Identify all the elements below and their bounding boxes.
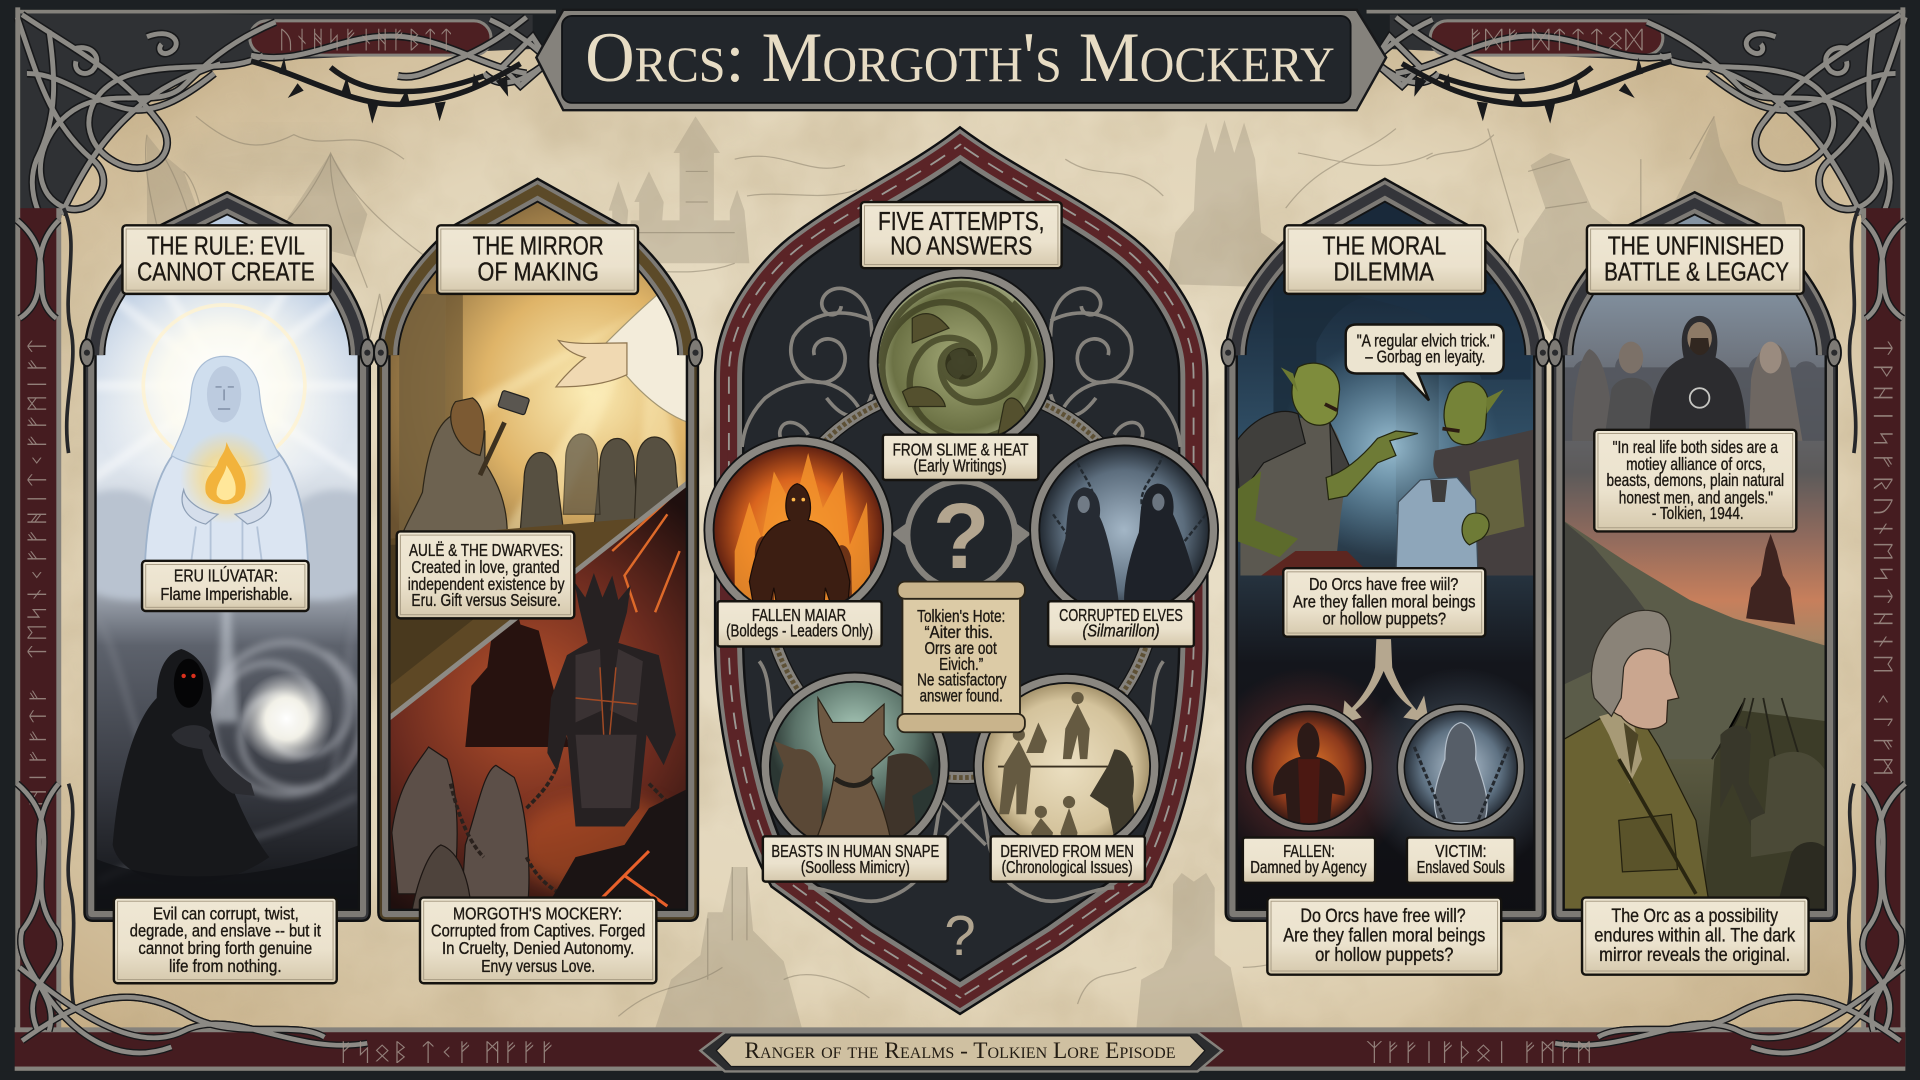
caption: Aule: independent existence by (408, 574, 565, 594)
scroll: Tolkien's note: Eivich.” (939, 654, 983, 674)
sketched background: castle (606, 116, 857, 276)
shield frame (715, 127, 1207, 1014)
illustration: Eru and the shadow (96, 216, 358, 909)
illustration: two orcs arguing (1238, 202, 1534, 909)
forked arrows (1342, 639, 1429, 724)
thorn scrolls (742, 288, 1180, 901)
arch outline and knobs (1548, 192, 1841, 921)
label: corrupted elves: CORRUPTED ELVES (1059, 605, 1183, 625)
frame: arch (84, 192, 370, 921)
label: corrupted elves (1048, 601, 1194, 647)
label: victim: VICTIM: (1435, 841, 1487, 861)
heading: five attempts: NO ANSWERS (890, 233, 1032, 261)
heading: unfinished battle: THE UNFINISHED (1608, 233, 1784, 261)
medallion: fallen (1249, 708, 1369, 828)
left border band with runes: ᛏᛖᛋᚾᚲᚠᚠᚻᛁᛏᚲᚠᚠᛗᛁᚠᛏ (25, 337, 49, 661)
heading: moral dilemma (1284, 225, 1485, 294)
question box: Are they fallen moral beings (1293, 591, 1476, 611)
caption: free will question (1267, 898, 1501, 975)
quote box: Tolkien 1944: beasts, demons, plain natural (1607, 470, 1784, 490)
caption: Morgoth's mockery (420, 898, 656, 983)
quote box: Tolkien 1944: motiey alliance of orcs, (1626, 454, 1766, 474)
label: fallen maiar: (Boldegs - Leaders Only) (726, 621, 873, 641)
medallion: from slime and heat (868, 270, 1055, 434)
label: fallen: FALLEN: (1283, 841, 1335, 861)
heading: the mirror (437, 225, 638, 294)
caption: evil can corrupt: degrade, and enslave -- but it (130, 921, 321, 941)
scroll: Tolkien's note: Orrs are oot (924, 638, 997, 658)
caption: Morgoth's mockery: MORGOTH'S MOCKERY: (453, 904, 622, 924)
medallion: fallen maiar (709, 441, 888, 620)
thorn vine top left (251, 58, 520, 124)
caption: the orc as a possibility: mirror reveals the original. (1599, 944, 1790, 966)
question box: Do Orcs have free wiil? (1309, 574, 1458, 594)
panel: the rule, evil cannot create (67, 184, 390, 983)
illustration: Morgoth and the captives (390, 481, 686, 909)
sketched background: orc warriors (1427, 116, 1794, 367)
heading: the mirror: THE MIRROR (473, 233, 604, 261)
heading: the rule: CANNOT CREATE (137, 258, 315, 286)
scroll: Tolkien's note: Tolkien's Hote: (917, 606, 1005, 626)
label: fallen maiar: FALLEN MAIAR (752, 605, 846, 625)
left border band with runes (15, 7, 367, 1070)
title plaque (536, 10, 1386, 110)
speech bubble: – Gorbag en leyaity. (1365, 346, 1485, 366)
speech bubble (1346, 324, 1504, 400)
label: from slime and heat (883, 435, 1038, 480)
right border band with runes (1555, 7, 1905, 1070)
question mark medallion (891, 481, 1031, 589)
arch outline and knobs (80, 192, 374, 921)
panel: the unfinished battle and legacy (1548, 184, 1841, 975)
panel: the mirror of making (374, 171, 702, 983)
top left ornamental corner and rune cartouche: ᚢᚾᚻᛋᚠᚾᚻᚠᛒᛏᛏ (278, 25, 454, 54)
label: fallen maiar (718, 601, 882, 647)
title: Orcs: Morgoth's Mockery (585, 19, 1335, 97)
caption: free will question: Are they fallen moral beings (1283, 925, 1485, 947)
label: from slime and heat: FROM SLIME & HEAT (893, 440, 1029, 460)
thorn vine top right (1402, 58, 1671, 124)
caption: evil can corrupt (114, 898, 337, 983)
quote box: Tolkien 1944: - Tolkien, 1944. (1652, 503, 1744, 523)
caption: Morgoth's mockery: Envy versus Love. (481, 956, 595, 976)
quote box: Tolkien 1944: honest men, and angels." (1619, 487, 1773, 507)
caption: Eru: Flame Imperishable. (160, 584, 293, 604)
illustration: hero, host and Tolkien on the battlefield (1564, 216, 1824, 909)
heading: the mirror: OF MAKING (478, 258, 599, 286)
medallion: corrupted elves (1035, 441, 1213, 620)
quote box: Tolkien 1944 (1594, 430, 1796, 531)
bottom border band with runes: ᚠᛋᛟᛒ ᛏᚲᚠ ᛗᚠᚠᚠ (337, 1037, 556, 1066)
medallion: beasts (765, 677, 944, 857)
heading: five attempts (861, 202, 1062, 268)
speech bubble: "A regular elvich trick." (1357, 331, 1495, 351)
question mark: ? (933, 484, 990, 588)
sketched background: lower left castle ruins (618, 867, 869, 1029)
arch outline and knobs (374, 179, 702, 921)
label: victim (1407, 838, 1515, 883)
caption: Eru: ERU ILÚVATAR: (174, 566, 278, 586)
sketched background: dark tower (1065, 120, 1433, 288)
caption: the orc as a possibility (1582, 898, 1809, 975)
scroll: Tolkien's note (898, 582, 1025, 732)
label: fallen (1243, 838, 1375, 883)
heading: unfinished battle (1587, 225, 1804, 294)
question box: or hollow puppets? (1322, 608, 1446, 628)
heading: the rule: THE RULE: EVIL (147, 233, 305, 261)
label: beasts in human shape: (Soolless Mimicry) (801, 857, 910, 877)
illustration: Aule and the dwarves (390, 202, 686, 714)
footer plaque (700, 1032, 1222, 1071)
label: derived from men: (Chronological Issues) (1002, 857, 1133, 877)
caption: Morgoth's mockery: Corrupted from Captives. Forged (431, 921, 645, 941)
sketched background: lower right tower (1078, 873, 1341, 1029)
caption: Aule: Eru. Gift versus Seisure. (411, 590, 561, 610)
frame: arch (378, 179, 698, 921)
bottom border band with runes (0, 220, 1920, 1080)
label: derived from men (991, 836, 1145, 882)
scroll: Tolkien's note: Ne satisfactory (917, 670, 1007, 690)
heading: the rule (122, 225, 331, 294)
lower question mark: ? (944, 904, 976, 967)
arch outline and knobs (1221, 179, 1550, 921)
label: corrupted elves: (Silmarillon) (1082, 621, 1160, 641)
label: fallen: Damned by Agency (1250, 857, 1367, 877)
connecting ring (765, 386, 1157, 778)
panel: the moral dilemma (1204, 171, 1565, 975)
shield body (715, 127, 1207, 1014)
quote box: Tolkien 1944: "In real life both sides are a (1613, 437, 1778, 457)
right border band with runes: ᛏᚹᚺᛁᛋᚠᚱᚢᚾᛖᛋᛏᚺᚾᛖ ᚲᛚᚠᛗ (1871, 337, 1895, 778)
heading: five attempts: FIVE ATTEMPTS, (878, 208, 1044, 236)
footer text: Ranger of the Realms - Tolkien Lore Episode (744, 1038, 1176, 1064)
top right ornamental corner and rune cartouche (1367, 10, 1905, 233)
caption: evil can corrupt: life from nothing. (169, 956, 282, 976)
caption: Aule: AULË & THE DWARVES: (409, 540, 563, 560)
heading: unfinished battle: BATTLE & LEGACY (1604, 258, 1789, 286)
label: victim: Enslaved Souls (1417, 857, 1505, 877)
caption: evil can corrupt: cannot bring forth genuine (138, 938, 312, 958)
label: from slime and heat: (Early Writings) (913, 455, 1007, 475)
top right ornamental corner and rune cartouche: ᚠᛞᚠ ᛞᛏᛏᛏᛟᛞ (1466, 25, 1643, 54)
caption: Aule: Created in love, granted (411, 557, 560, 577)
scroll: Tolkien's note: answer found. (920, 686, 1003, 706)
frame: arch (1226, 179, 1545, 921)
label: beasts in human shape: BEASTS IN HUMAN SNAPE (771, 841, 939, 861)
caption: free will question: or hollow puppets? (1315, 944, 1454, 966)
label: derived from men: DERIVED FROM MEN (1000, 841, 1134, 861)
top left ornamental corner and rune cartouche (17, 10, 556, 233)
shield outline (715, 127, 1207, 1014)
left border band with runes: ᛗᛁᚠᚠᛏᚠ (28, 686, 49, 808)
caption: evil can corrupt: Evil can corrupt, twist, (153, 904, 299, 924)
frame: arch (1553, 192, 1837, 921)
sketched background: mountains top left (146, 116, 435, 355)
label: beasts in human shape (763, 836, 948, 882)
caption: the orc as a possibility: The Orc as a possibility (1611, 905, 1778, 927)
scroll: Tolkien's note: “Aiter this. (924, 622, 993, 642)
caption: Aule (397, 531, 574, 618)
panel: five attempts, no answers (709, 127, 1213, 1014)
caption: the orc as a possibility: endures within all. The dark (1594, 925, 1795, 947)
question box (1283, 568, 1485, 637)
medallion: victim (1401, 708, 1521, 828)
heading: moral dilemma: THE MORAL (1322, 233, 1446, 261)
medallion: derived from men (978, 678, 1155, 855)
bottom border band with runes: ᛉᚠᚠᛁᚠᚦᛟᛁ ᚠᛗᚠᛗ (1365, 1037, 1593, 1066)
caption: Morgoth's mockery: In Cruelty, Denied Autonomy. (442, 938, 634, 958)
heading: moral dilemma: DILEMMA (1333, 258, 1435, 286)
caption: Eru (142, 561, 309, 611)
caption: free will question: Do Orcs have free will? (1300, 905, 1466, 927)
